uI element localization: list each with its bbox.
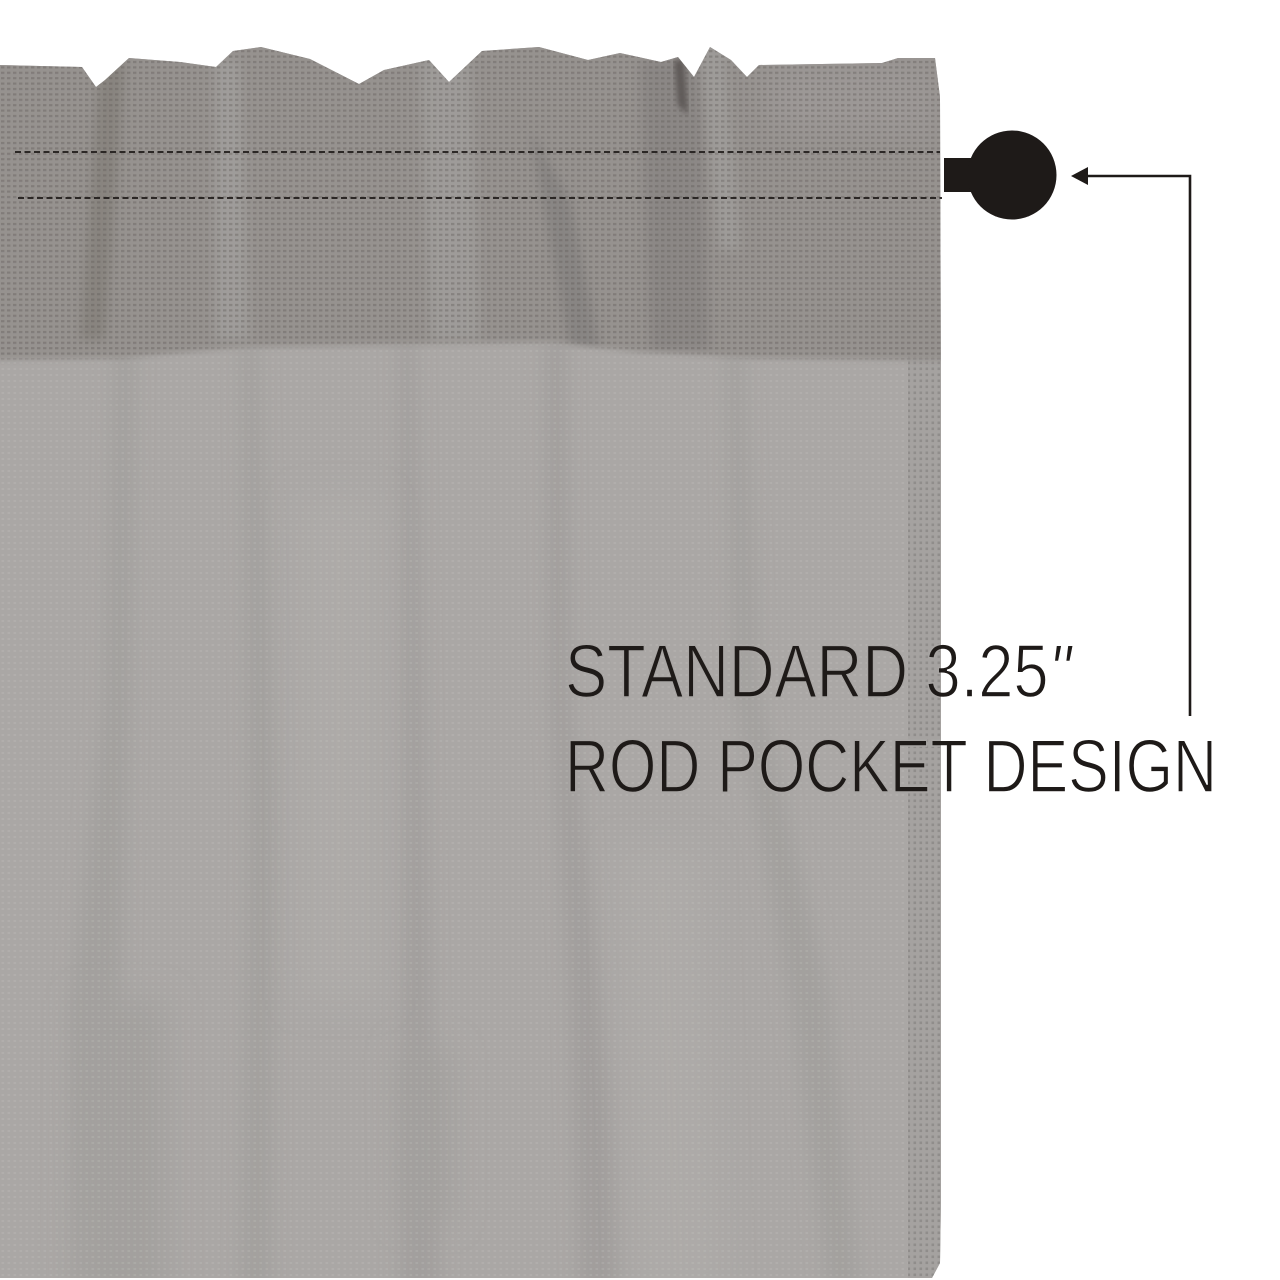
callout: rod pocket label bbox=[565, 629, 1217, 808]
stitching lines: rod pocket dashed guides bbox=[15, 152, 942, 198]
curtain body fabric bbox=[0, 40, 945, 1280]
curtain panel bbox=[0, 40, 945, 1280]
arrow: leader from label to rod finial bbox=[1071, 167, 1190, 716]
callout: rod pocket label: STANDARD 3.25" bbox=[565, 629, 1074, 713]
rod pocket header band bbox=[0, 40, 945, 370]
side hem bbox=[908, 350, 943, 1280]
icon: curtain rod with round finial bbox=[944, 130, 1056, 220]
